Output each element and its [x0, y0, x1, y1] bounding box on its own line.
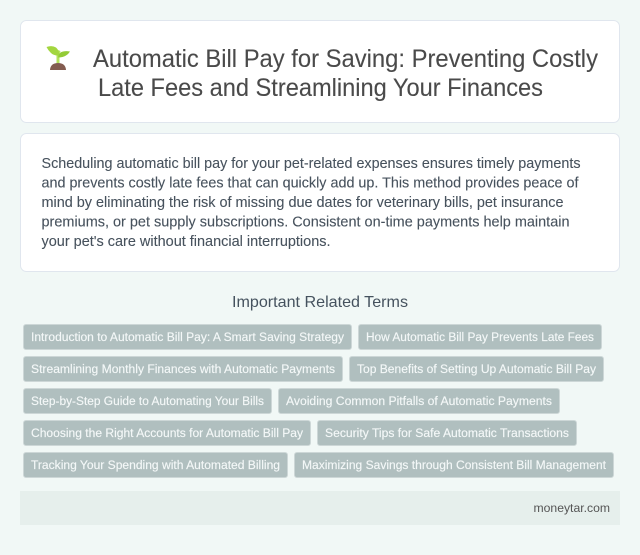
tag: [278, 388, 560, 414]
text block: description paragraph: [42, 156, 580, 250]
tag: [24, 356, 342, 382]
tag: Top Benefits of Setting Up Automatic Bill Pay: [357, 362, 597, 376]
tag: [24, 420, 310, 446]
tag: [24, 452, 288, 478]
tag: [24, 388, 272, 414]
tag: [358, 324, 602, 350]
text block: description paragraph: premiums, or pet supply subscriptions. Consistent on-time payments help maintain: [42, 214, 570, 230]
text block: description paragraph: your pet's care without financial interruptions.: [42, 234, 330, 250]
tag: Choosing the Right Accounts for Automatic Bill Pay: [31, 426, 304, 440]
title: Late Fees and Streamlining Your Finances: [98, 74, 543, 102]
panel: description: [20, 134, 620, 272]
title: Automatic Bill Pay for Saving: Preventing Costly: [93, 45, 598, 73]
tag: [294, 452, 614, 478]
tag: How Automatic Bill Pay Prevents Late Fees: [366, 330, 594, 344]
footer: [20, 491, 620, 525]
text block: description paragraph: and prevents costly late fees that can quickly add up. This method provides peace of: [42, 176, 579, 192]
tag: Tracking Your Spending with Automated Billing: [31, 458, 280, 472]
tag: [318, 420, 576, 446]
tag list: [24, 324, 614, 478]
title: [93, 45, 598, 102]
tag: Step-by-Step Guide to Automating Your Bills: [31, 394, 264, 408]
tag: Streamlining Monthly Finances with Automatic Payments: [31, 362, 335, 376]
tag: Security Tips for Safe Automatic Transactions: [325, 426, 569, 440]
icon: seedling: [46, 46, 70, 70]
tag: Maximizing Savings through Consistent Bill Management: [302, 458, 607, 472]
footer source text: moneytar.com: [534, 501, 610, 515]
panel: title card: [20, 20, 620, 122]
heading: related terms: Important Related Terms: [232, 294, 408, 311]
tag: [24, 324, 352, 350]
text block: description paragraph: Scheduling automatic bill pay for your pet-related expenses ensures timely payments: [42, 156, 580, 172]
tag: [350, 356, 604, 382]
text block: description paragraph: mind by eliminating the risk of missing due dates for veterinary bills, pet insurance: [42, 195, 564, 211]
tag: Introduction to Automatic Bill Pay: A Smart Saving Strategy: [31, 330, 345, 344]
tag: Avoiding Common Pitfalls of Automatic Payments: [286, 394, 552, 408]
